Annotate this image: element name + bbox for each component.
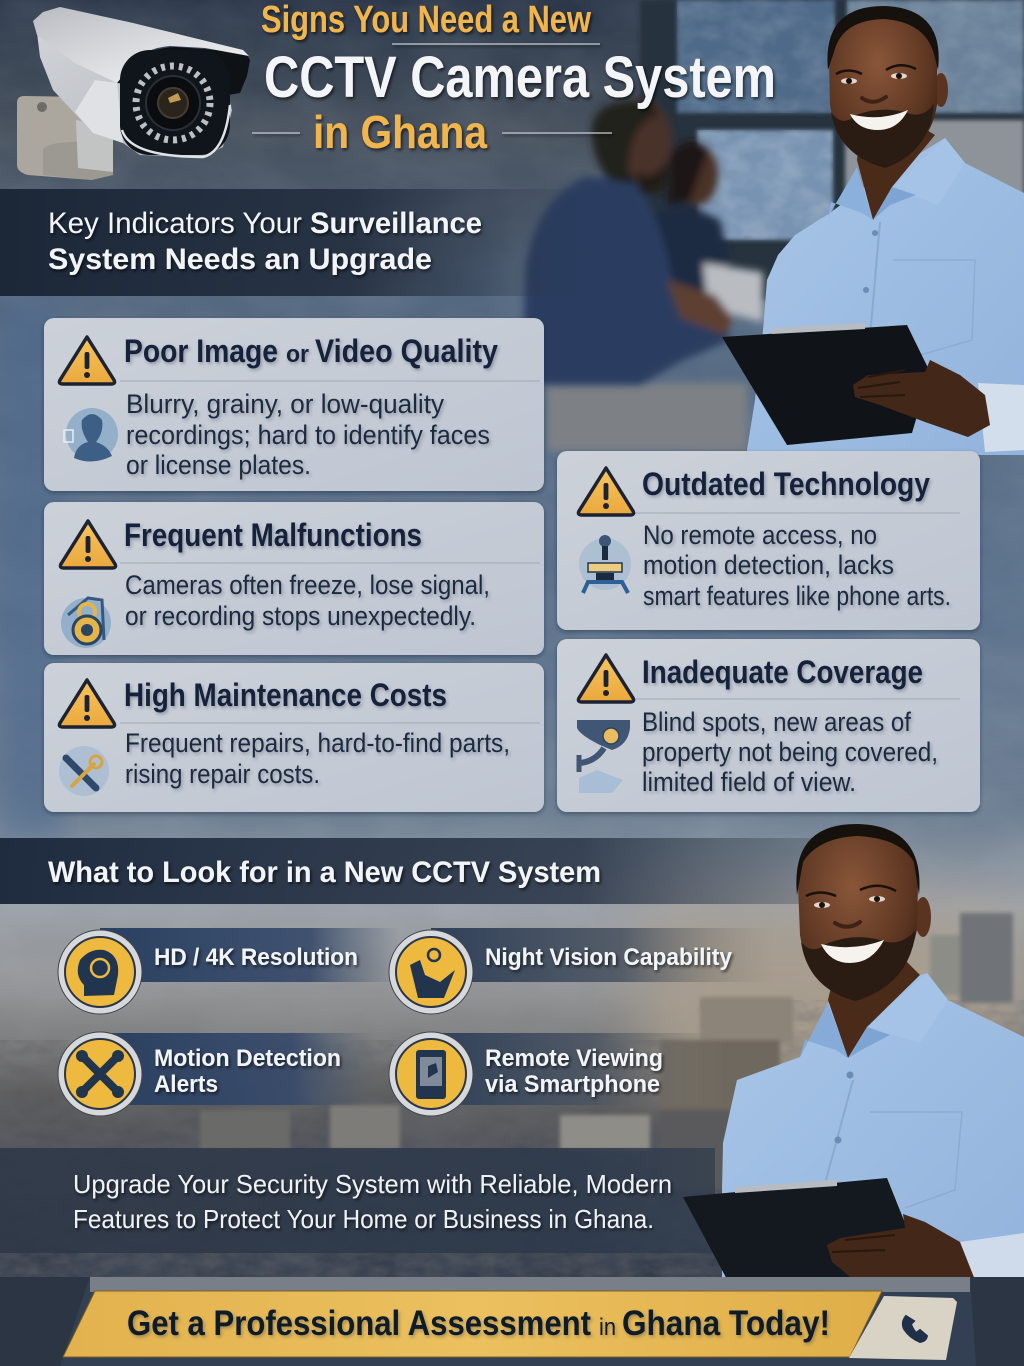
- closing statement text: Upgrade Your Security System with Reliable, Modern: [73, 1169, 672, 1199]
- card text: [125, 728, 510, 789]
- feature: HD / 4K resolution: [58, 928, 400, 1014]
- camera hood: [33, 7, 249, 83]
- city skyline: [200, 913, 1013, 1190]
- card heading: Poor Image: [124, 333, 278, 369]
- cta gold ribbon: [63, 1291, 882, 1357]
- beard: [831, 104, 934, 168]
- monitor wall: [640, 0, 1024, 300]
- what to look for heading: What to Look for in a New CCTV System: [48, 856, 601, 889]
- face: [798, 826, 918, 1000]
- shirt: [747, 138, 1024, 455]
- eyes: [836, 65, 916, 102]
- card heading: Inadequate Coverage: [642, 654, 923, 690]
- card text: or license plates.: [126, 450, 311, 480]
- camera hood underside: [117, 47, 250, 95]
- camera lens: [146, 76, 200, 130]
- card text: property not being covered,: [642, 737, 938, 767]
- title: Signs You Need a New: [261, 0, 591, 41]
- camera body: [37, 33, 232, 157]
- feature: remote viewing via smartphone: Remote Viewing: [485, 1045, 663, 1072]
- title: in Ghana: [313, 106, 487, 158]
- warning icon: [578, 655, 634, 702]
- feature: remote viewing via smartphone: [389, 1032, 726, 1116]
- card text: [126, 389, 490, 480]
- camera face: [120, 50, 230, 155]
- card text: Blurry, grainy, or low-quality: [126, 389, 444, 419]
- background operators: [523, 98, 763, 385]
- icon: old camera on tripod: [579, 535, 631, 593]
- neck: [857, 120, 935, 220]
- title: CCTV Camera System: [264, 45, 776, 110]
- card text: [643, 520, 951, 611]
- card text: Cameras often freeze, lose signal,: [125, 570, 490, 600]
- ear: [934, 73, 948, 107]
- call to action: [0, 1277, 1024, 1366]
- card text: limited field of view.: [642, 767, 856, 797]
- card text: Frequent repairs, hard-to-find parts,: [125, 728, 510, 758]
- shirt: [722, 973, 1024, 1285]
- closing statement text: Features to Protect Your Home or Business in Ghana.: [73, 1204, 654, 1234]
- hair: [827, 6, 939, 70]
- camera LED ring: [136, 66, 210, 140]
- man: top figure: [747, 6, 1024, 455]
- security camera illustration: [17, 7, 250, 180]
- icon: crossed tools: [59, 746, 109, 796]
- title: [252, 0, 776, 158]
- collar: [800, 1003, 848, 1058]
- cta text: Get a Professional Assessment: [127, 1304, 591, 1343]
- section: cards: [44, 318, 980, 812]
- feature: motion detection alerts: [58, 1032, 375, 1116]
- section band: what to look for: [0, 838, 830, 904]
- card heading: Outdated Technology: [642, 466, 930, 502]
- key indicators heading: [48, 207, 482, 276]
- card text: No remote access, no: [643, 520, 877, 550]
- key indicators band background: [0, 189, 590, 296]
- card heading: [124, 333, 498, 369]
- warning icon: [59, 680, 115, 727]
- feature: night vision capability: [389, 928, 776, 1014]
- face: [829, 8, 937, 166]
- card: poor image or video quality: [44, 318, 544, 491]
- feature: remote viewing via smartphone: via Smartphone: [485, 1071, 660, 1098]
- icon: person silhouette: [64, 408, 118, 462]
- closing statement text: [73, 1169, 672, 1234]
- key indicators heading: Surveillance: [310, 207, 482, 240]
- cta text: in: [599, 1314, 616, 1341]
- camera mount: [17, 96, 113, 180]
- features: [58, 928, 776, 1116]
- card text: smart features like phone arts.: [643, 581, 951, 611]
- cta text: Ghana Today!: [622, 1304, 830, 1343]
- feature: motion detection alerts: Motion Detection: [154, 1045, 341, 1072]
- clipboard: top figure: [722, 323, 1024, 452]
- warning icon: [59, 337, 115, 384]
- warning icon: [578, 468, 634, 515]
- clipboard: bottom figure: [683, 1178, 1024, 1285]
- card text: recordings; hard to identify faces: [126, 420, 490, 450]
- smile: [821, 940, 884, 963]
- card heading: Frequent Malfunctions: [124, 517, 422, 553]
- key indicators heading: Key Indicators Your: [48, 207, 302, 240]
- card heading: Video Quality: [315, 333, 498, 369]
- cta backing plate: [0, 1277, 1024, 1366]
- card text: motion detection, lacks: [643, 550, 894, 580]
- man: bottom figure: [722, 824, 1024, 1285]
- card: outdated technology: [557, 451, 980, 630]
- hair: [796, 824, 919, 895]
- neck: [828, 960, 920, 1058]
- card heading: High Maintenance Costs: [124, 677, 447, 713]
- card text: rising repair costs.: [125, 759, 320, 789]
- card text: Blind spots, new areas of: [642, 707, 911, 737]
- feature: HD / 4K resolution: HD / 4K Resolution: [154, 944, 358, 971]
- card: high maintenance costs: [44, 663, 544, 812]
- feature: night vision capability: Night Vision Capability: [485, 944, 733, 971]
- card text: or recording stops unexpectedly.: [125, 601, 476, 631]
- icon: wall camera: [577, 720, 630, 793]
- icon: padlock gear: [61, 598, 111, 648]
- card: frequent malfunctions: [44, 502, 544, 655]
- closing statement band: [0, 1148, 715, 1253]
- beard: [801, 930, 916, 1001]
- card text: [642, 707, 938, 797]
- card text: [125, 570, 490, 631]
- card heading: or: [286, 341, 309, 368]
- key indicators heading: System Needs an Upgrade: [48, 243, 432, 276]
- smile: [850, 110, 908, 130]
- eyes: [806, 886, 896, 927]
- warning icon: [60, 521, 116, 568]
- collar: [828, 167, 873, 220]
- ear: [915, 897, 931, 937]
- cta phone tab: [849, 1296, 957, 1360]
- card: inadequate coverage: [557, 639, 980, 812]
- feature: motion detection alerts: Alerts: [154, 1071, 218, 1098]
